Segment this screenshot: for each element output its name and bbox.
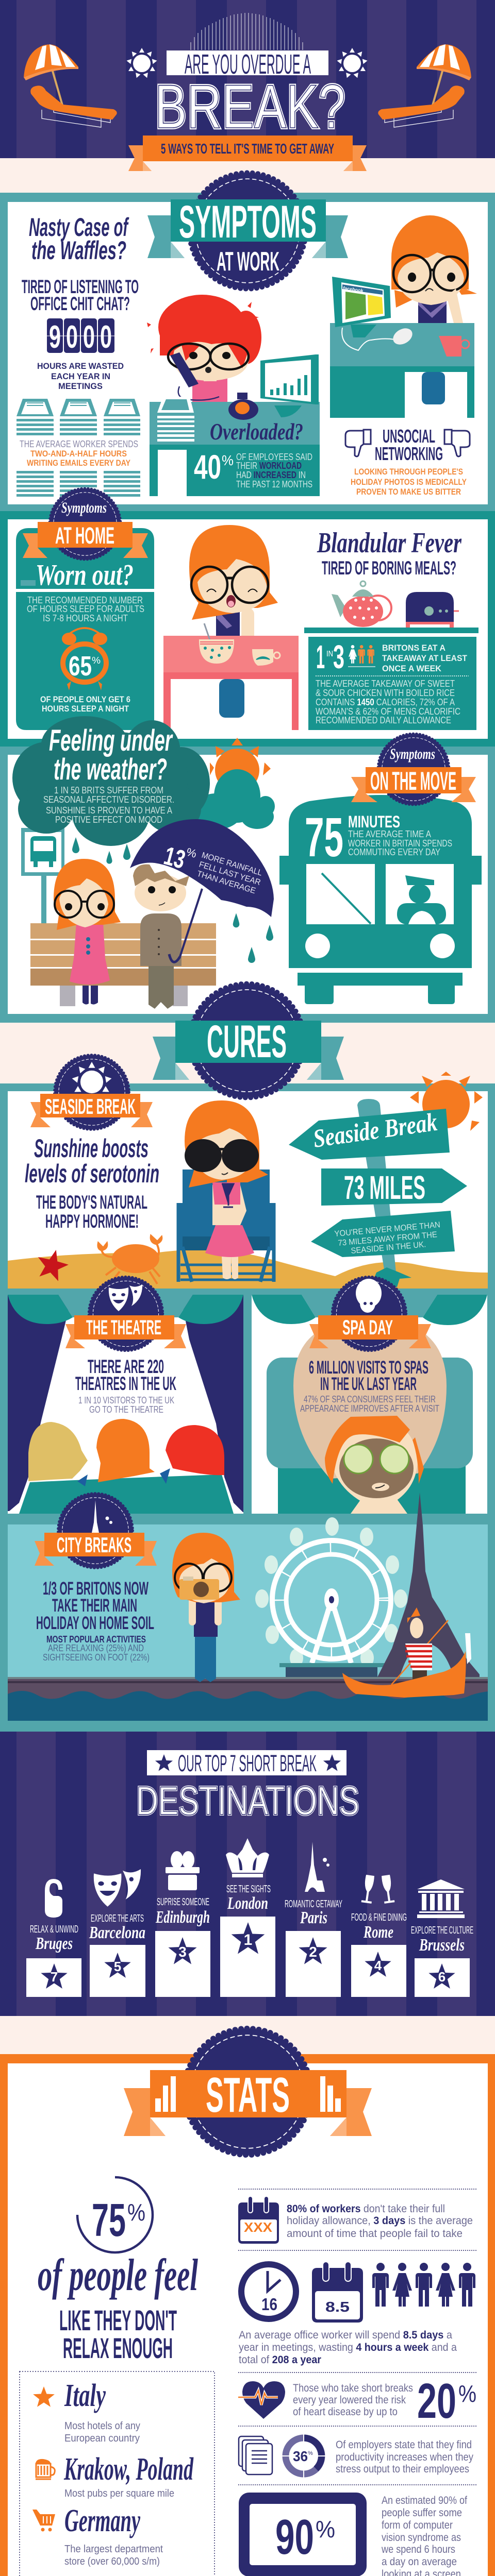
destination 5 barcelona: 5 <box>114 1959 121 1974</box>
facebook monitor <box>332 277 391 337</box>
destination 6 brussels: Brussels <box>419 1936 465 1955</box>
cures heading badge: CURES <box>207 1015 287 1067</box>
sun rays dome <box>191 13 303 50</box>
sun icon left <box>126 48 157 79</box>
italy: Italy <box>64 2378 106 2413</box>
sun icon right <box>337 48 368 79</box>
panel: destinations <box>0 1732 495 2016</box>
relax enough heading <box>59 2304 177 2364</box>
title BREAK?: BREAK? <box>155 72 345 141</box>
worn out card <box>16 528 154 591</box>
spa badge: SPA DAY <box>342 1316 393 1339</box>
header banner <box>0 0 495 171</box>
happy hormone text: HAPPY HORMONE! <box>45 1211 139 1232</box>
spa panel <box>252 1277 487 1514</box>
9000 counter: 0 <box>100 319 112 355</box>
title BREAK?: BREAK? <box>155 72 345 141</box>
city breaks text: 1/3 OF BRITONS NOW <box>43 1579 148 1599</box>
ground and water <box>8 1677 488 1721</box>
subtitle ribbon <box>128 135 367 171</box>
productivity stat <box>239 2434 473 2478</box>
theatre stat text: THEATRES IN THE UK <box>75 1373 176 1394</box>
chart monitor <box>260 354 319 417</box>
purple umbrella: % <box>185 845 198 860</box>
thumbs down right <box>444 430 470 456</box>
sun top right <box>410 1072 483 1133</box>
destination 3 edinburgh <box>155 1851 210 1997</box>
raindrops <box>72 837 273 963</box>
city breaks text: HOLIDAY ON HOME SOIL <box>36 1613 154 1633</box>
meetings stat: An average office worker will spend 8.5 days a <box>239 2329 452 2341</box>
75 percent ring: % <box>127 2199 145 2226</box>
at home badge <box>23 489 148 559</box>
city breaks badge <box>35 1494 157 1568</box>
desk phone <box>228 393 258 420</box>
bench <box>30 923 216 1006</box>
destination 5 barcelona: Barcelona <box>89 1923 145 1942</box>
chit chat question: TIRED OF LISTENING TO <box>22 276 139 297</box>
sign: seaside break <box>289 1107 450 1160</box>
chit chat question: OFFICE CHIT CHAT? <box>30 293 130 314</box>
yawning girl at table <box>163 525 299 730</box>
on the move badge <box>351 734 476 804</box>
overloaded label: Overloaded? <box>210 418 303 445</box>
destination 7 bruges: 7 <box>51 1969 58 1985</box>
takeaway stat box: ONCE A WEEK <box>382 664 442 673</box>
divider band: light teal <box>0 504 495 511</box>
heart disease stat: Those who take short breaks <box>293 2382 413 2394</box>
title line box <box>167 49 328 80</box>
sand dunes <box>8 1250 488 1289</box>
city breaks text: ARE RELAXING (25%) AND <box>48 1643 144 1653</box>
germany: The largest department <box>64 2544 163 2555</box>
computer vision stat: % <box>316 2516 335 2543</box>
destination 4 rome <box>351 1875 407 1997</box>
thumbs down left <box>345 430 371 456</box>
takeaway stat box: 1 <box>316 638 325 675</box>
destinations top box <box>147 1750 346 1776</box>
spa stat text: APPEARANCE IMPROVES AFTER A VISIT <box>300 1403 439 1414</box>
destination 4 rome: 4 <box>374 1958 382 1973</box>
spa face <box>325 1416 424 1514</box>
waffles heading <box>29 213 129 265</box>
takeaway stat box: IN <box>326 650 333 658</box>
purple umbrella: FELL LAST YEAR <box>198 860 261 887</box>
seasonal disorder text <box>43 785 174 825</box>
75 minutes stat <box>305 806 452 868</box>
meetings stat <box>239 2262 475 2366</box>
takeaway stat box: 3 <box>333 638 344 675</box>
teapot <box>332 581 391 627</box>
unsocial networking heading <box>375 426 443 464</box>
spa stat text: 47% OF SPA CONSUMERS FEEL THEIR <box>304 1394 436 1404</box>
seasonal disorder text: POSITIVE EFFECT ON MOOD <box>55 815 162 825</box>
holiday allowance stat: amount of time that people fail to take <box>287 2228 463 2240</box>
purple umbrella <box>130 819 274 962</box>
germany: Germany <box>64 2503 140 2538</box>
paper stack on desk <box>157 397 194 442</box>
computer vision stat: An estimated 90% of <box>382 2495 467 2506</box>
75 percent ring <box>77 2177 153 2252</box>
40 percent stat: THEIR WORKLOAD <box>236 461 302 471</box>
destination 3 edinburgh: 3 <box>178 1944 187 1960</box>
country records box <box>20 2371 214 2576</box>
75 minutes stat: MINUTES <box>348 812 400 831</box>
destination 3 edinburgh: Edinburgh <box>155 1908 210 1927</box>
feeling under the weather heading: Feeling under <box>49 724 173 757</box>
subtitle ribbon: 5 WAYS TO TELL IT'S TIME TO GET AWAY <box>161 141 334 157</box>
worn out card: Worn out? <box>36 558 134 591</box>
germany <box>32 2503 163 2567</box>
heart disease stat <box>238 2374 476 2429</box>
moustache cup <box>252 649 280 666</box>
destination 7 bruges: Bruges <box>35 1934 73 1953</box>
hours wasted text: EACH YEAR IN <box>51 371 110 381</box>
9000 counter: 0 <box>66 319 78 355</box>
sign: never more than: SEASIDE IN THE UK. <box>351 1240 426 1256</box>
unsocial girl at desk <box>330 215 477 418</box>
9000 counter: 9 <box>49 319 61 355</box>
sleep stat card: IS 7-8 HOURS A NIGHT <box>43 613 128 623</box>
takeaway stat box: BRITONS EAT A <box>382 643 446 653</box>
alarm clock <box>62 628 107 690</box>
takeaway stat box: CONTAINS 1450 CALORIES, 72% OF A <box>316 697 455 707</box>
seaside badge <box>30 1055 153 1129</box>
spa valance <box>252 1295 487 1325</box>
9000 counter: 0 <box>83 319 95 355</box>
hours wasted text: HOURS ARE WASTED <box>37 361 124 371</box>
spa badge <box>309 1277 431 1350</box>
takeaway stat box: RECOMMENDED DAILY ALLOWANCE <box>316 715 451 725</box>
destination 3 edinburgh: SUPRISE SOMEONE <box>157 1896 209 1908</box>
productivity stat: productivity increases when they <box>336 2451 473 2463</box>
toaster <box>406 592 459 628</box>
sleep stat card: OF PEOPLE ONLY GET 6 <box>40 694 130 704</box>
holiday photos text: LOOKING THROUGH PEOPLE'S <box>354 467 463 477</box>
header banner: ARE YOU OVERDUE A <box>185 49 311 80</box>
chit chat question <box>22 276 139 314</box>
krakow: Most pubs per square mile <box>64 2488 174 2499</box>
unsocial networking heading: UNSOCIAL <box>383 426 435 447</box>
destination 1 london: London <box>227 1894 268 1913</box>
city breaks text: SIGHTSEEING ON FOOT (22%) <box>43 1652 150 1663</box>
holiday allowance stat: 80% of workers don't take their full <box>287 2203 445 2215</box>
panel: stats: RELAX ENOUGH <box>63 2332 173 2364</box>
bus stop sign <box>21 828 64 925</box>
computer vision stat: 90 <box>275 2510 314 2565</box>
computer vision stat: vision syndrome as <box>382 2532 461 2544</box>
at home badge: AT HOME <box>55 522 114 549</box>
sign: never more than: 73 MILES AWAY FROM THE <box>338 1230 438 1248</box>
heading badge: symptoms at work <box>147 173 348 289</box>
theatre stat text <box>75 1356 176 1415</box>
computer vision stat <box>238 2493 467 2576</box>
sun behind cloud <box>210 738 271 792</box>
facebook monitor: facebook <box>343 285 364 294</box>
theatre badge: THE THEATRE <box>86 1316 161 1339</box>
hours wasted text <box>37 361 124 391</box>
stats heading badge <box>124 2028 372 2155</box>
75 minutes stat: 75 <box>305 806 343 868</box>
italy: European country <box>64 2433 140 2444</box>
theatre stat text: THERE ARE 220 <box>88 1356 164 1377</box>
paper stacks lower <box>16 471 140 497</box>
holiday allowance stat: XXX <box>244 2219 273 2235</box>
purple umbrella: THAN AVERAGE <box>196 870 257 895</box>
dark rain cloud <box>12 716 210 846</box>
40 percent stat: % <box>222 452 234 468</box>
takeaway stat box: & SOUR CHICKEN WITH BOILED RICE <box>316 688 455 698</box>
krakow <box>36 2452 194 2499</box>
city breaks text <box>36 1579 154 1663</box>
city girl with camera <box>172 1533 240 1682</box>
sign: never more than <box>311 1211 455 1257</box>
40 percent stat: THE PAST 12 MONTHS <box>236 479 312 489</box>
overloaded girl <box>147 295 261 403</box>
panel: stats <box>0 2028 495 2576</box>
beach girl in deck chair <box>178 1100 274 1282</box>
holiday allowance stat <box>238 2196 473 2244</box>
destination 6 brussels <box>411 1879 473 1997</box>
emails text: WRITING EMAILS EVERY DAY <box>27 458 131 468</box>
takeaway stat box <box>308 637 476 730</box>
destination 1 london: 1 <box>244 1931 252 1948</box>
destination 7 bruges: RELAX & UNWIND <box>30 1924 78 1935</box>
of people feel heading: of people feel <box>38 2250 198 2300</box>
overloaded desk <box>150 354 320 496</box>
panel: cures background <box>0 984 495 2576</box>
computer vision stat: we spend 6 hours <box>381 2544 455 2555</box>
hours wasted text: MEETINGS <box>58 381 103 391</box>
sleep stat card <box>16 592 154 730</box>
takeaway stat box: TAKEAWAY AT LEAST <box>382 653 468 663</box>
destination 1 london: SEE THE SIGHTS <box>226 1884 271 1895</box>
italy <box>33 2378 140 2444</box>
sleep stat card: % <box>92 655 101 666</box>
city breaks panel <box>8 1493 488 1721</box>
destination 2 paris: 2 <box>309 1944 317 1960</box>
stats heading badge: STATS <box>206 2067 290 2123</box>
destination 4 rome: Rome <box>363 1923 393 1942</box>
starfish <box>34 1246 71 1282</box>
9000 counter <box>47 318 114 355</box>
waffles heading: the Waffles? <box>31 236 126 265</box>
destination 4 rome: FOOD & FINE DINING <box>351 1912 407 1923</box>
destination 2 paris: Paris <box>300 1908 327 1927</box>
eiffel tower <box>377 1493 480 1677</box>
spa stat text <box>300 1358 439 1414</box>
seasonal disorder text: SUNSHINE IS PROVEN TO HAVE A <box>46 805 172 816</box>
serotonin heading <box>25 1134 159 1188</box>
curtains <box>8 1295 243 1512</box>
gondola <box>342 1607 471 1698</box>
people icons <box>348 645 375 667</box>
panel: symptoms on the move <box>0 716 495 1023</box>
75 minutes stat: COMMUTING EVERY DAY <box>348 847 440 857</box>
towel turban <box>293 1319 447 1479</box>
productivity stat: 36 <box>293 2448 308 2464</box>
panel: symptoms at home <box>0 489 495 747</box>
serotonin heading: Sunshine boosts <box>34 1134 148 1163</box>
productivity stat: % <box>308 2450 313 2456</box>
40 percent stat <box>194 448 312 489</box>
panel: symptoms at work <box>0 173 495 504</box>
75 percent ring: 75 <box>92 2195 126 2246</box>
heart disease stat: every year lowered the risk <box>293 2394 406 2406</box>
girl under umbrella <box>54 859 121 1005</box>
holiday photos text: HOLIDAY PHOTOS IS MEDICALLY <box>351 477 467 487</box>
italy: Most hotels of any <box>64 2420 140 2432</box>
emails text: TWO-AND-A-HALF HOURS <box>30 449 127 459</box>
holiday photos text <box>351 467 467 497</box>
serotonin heading: levels of serotonin <box>25 1159 159 1188</box>
happy hormone text <box>36 1192 147 1232</box>
computer vision stat: people suffer some <box>382 2507 462 2519</box>
productivity stat: Of employers state that they find <box>336 2439 472 2451</box>
bus driver <box>397 875 446 924</box>
destination 5 barcelona <box>89 1869 145 1997</box>
theatre stat text: 1 IN 10 VISITORS TO THE UK <box>78 1395 174 1405</box>
computer vision stat: form of computer <box>382 2519 453 2531</box>
city breaks text: MOST POPULAR ACTIVITIES <box>46 1634 146 1645</box>
audience heads <box>28 1419 224 1486</box>
seaside badge: SEASIDE BREAK <box>45 1094 136 1118</box>
purple umbrella: 13 <box>161 841 188 874</box>
destination 1 london <box>220 1838 275 1997</box>
panel: stats: LIKE THEY DON'T <box>59 2304 177 2336</box>
takeaway stat box: THE AVERAGE TAKEAWAY OF SWEET <box>316 679 455 689</box>
destination 2 paris: ROMANTIC GETAWAY <box>285 1899 342 1910</box>
meetings stat: 8.5 <box>325 2299 350 2315</box>
purple umbrella: MORE RAINFALL <box>201 851 263 878</box>
left umbrella and lounger <box>24 44 117 127</box>
sleep stat card: 65 <box>69 651 92 682</box>
teal cloud <box>191 769 275 829</box>
destination 2 paris <box>285 1842 342 1997</box>
meetings stat: total of 208 a year <box>239 2354 321 2366</box>
destinations top box: OUR TOP 7 SHORT BREAK <box>178 1750 317 1776</box>
heading badge: symptoms at work: SYMPTOMS <box>179 196 317 247</box>
heart disease stat: % <box>458 2380 476 2407</box>
75 minutes stat: WORKER IN BRITAIN SPENDS <box>348 838 452 849</box>
right umbrella and lounger <box>378 44 471 127</box>
heart disease stat: of heart disease by up to <box>293 2406 398 2418</box>
city breaks text: TAKE THEIR MAIN <box>52 1596 137 1616</box>
seats <box>19 1475 234 1514</box>
at home badge: Symptoms <box>61 499 107 516</box>
seasonal disorder text: 1 IN 50 BRITS SUFFER FROM <box>54 785 163 795</box>
heart disease stat: 20 <box>417 2374 456 2429</box>
happy hormone text: THE BODY'S NATURAL <box>36 1192 147 1213</box>
bus illustration <box>279 795 482 1004</box>
holiday allowance stat: holiday allowance, 3 days is the average <box>287 2215 473 2227</box>
city breaks badge: CITY BREAKS <box>57 1533 131 1557</box>
theatre panel <box>8 1277 243 1514</box>
emails text: THE AVERAGE WORKER SPENDS <box>20 439 138 449</box>
cures heading badge <box>153 984 344 1098</box>
holiday photos text: PROVEN TO MAKE US BITTER <box>356 487 461 497</box>
sleep stat card: HOURS SLEEP A NIGHT <box>42 704 129 714</box>
destinations title: DESTINATIONS <box>136 1778 359 1823</box>
feeling under the weather heading <box>49 724 173 786</box>
valance <box>8 1295 243 1324</box>
sleep stat card: THE RECOMMENDED NUMBER <box>27 595 143 605</box>
40 percent stat: 40 <box>194 448 221 486</box>
theatre stat text: GO TO THE THEATRE <box>89 1404 163 1415</box>
krakow: Krakow, Poland <box>63 2452 194 2487</box>
cereal bowl <box>199 623 234 664</box>
destination 5 barcelona: EXPLORE THE ARTS <box>91 1913 144 1924</box>
emails text <box>20 439 138 468</box>
meetings stat: 16 <box>261 2295 277 2314</box>
heading badge: symptoms at work: AT WORK <box>217 247 279 277</box>
destination 7 bruges <box>26 1879 81 1997</box>
takeaway stat box: WOMAN'S & 62% OF MENS CALORIFIC <box>316 706 460 717</box>
seasonal disorder text: SEASONAL AFFECTIVE DISORDER. <box>43 794 174 805</box>
theatre badge <box>65 1277 186 1350</box>
computer vision stat: a day on average <box>382 2556 457 2568</box>
40 percent stat: HAD INCREASED IN <box>236 470 306 480</box>
destinations title: DESTINATIONS <box>136 1778 359 1823</box>
crab <box>97 1234 162 1284</box>
destination 6 brussels: 6 <box>438 1969 446 1985</box>
sleep stat card: OF HOURS SLEEP FOR ADULTS <box>27 604 144 614</box>
germany: store (over 60,000 s/m) <box>64 2556 160 2567</box>
signpost <box>289 1099 467 1287</box>
feeling under the weather heading: the weather? <box>54 753 167 786</box>
waffles heading: Nasty Case of <box>29 213 129 242</box>
london eye <box>255 1517 407 1677</box>
on the move badge: Symptoms <box>390 745 435 762</box>
productivity stat: stress output to their employees <box>336 2463 469 2475</box>
75 minutes stat: THE AVERAGE TIME A <box>348 829 431 839</box>
40 percent stat: OF EMPLOYEES SAID <box>236 452 312 462</box>
meetings stat: year in meetings, wasting 4 hours a week and a <box>239 2342 457 2353</box>
sign: 73 miles: 73 MILES <box>344 1169 425 1206</box>
sign: never more than: YOU'RE NEVER MORE THAN <box>334 1221 441 1239</box>
shelf <box>304 628 478 633</box>
boy under umbrella <box>133 865 189 1009</box>
paper stacks upper <box>16 399 140 435</box>
sign: seaside break: Seaside Break <box>311 1107 439 1153</box>
